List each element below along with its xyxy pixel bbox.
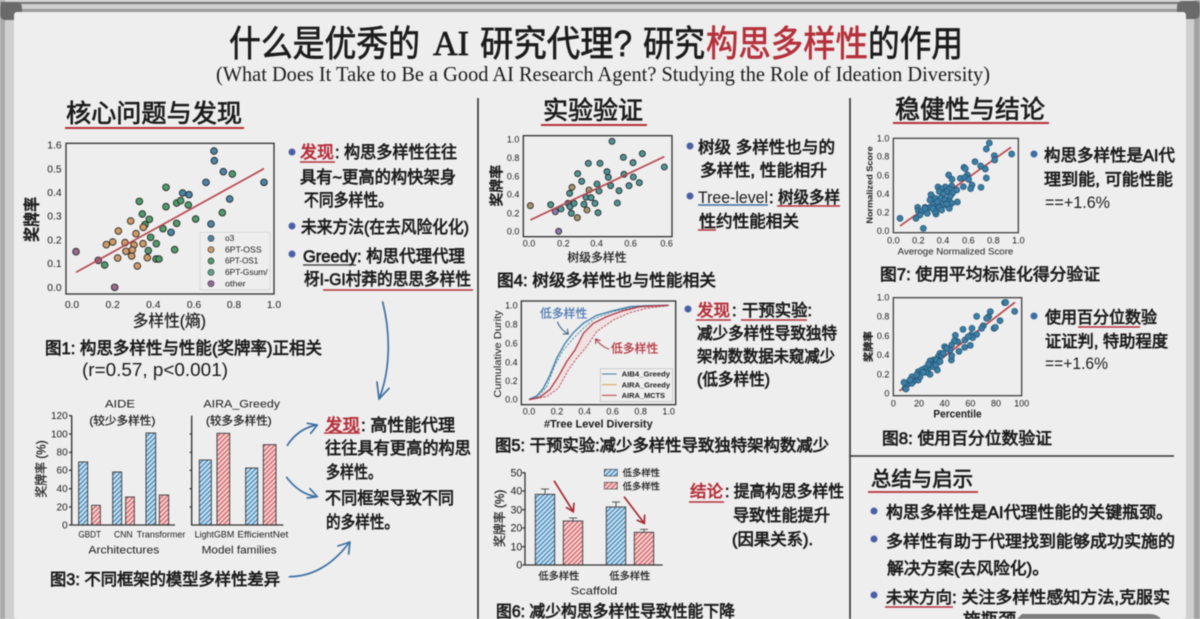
title (229, 23, 963, 64)
chart panel: AIRA_Greedy: (较多多样性) (206, 413, 272, 427)
arrows: figure 3 to findings (287, 423, 350, 577)
text block: figure 8 note: ==+1.6% (1045, 354, 1108, 373)
chart: figure 7 scatter: 0.0 (877, 226, 889, 236)
text block: summary list: 多样性有助于代理找到能够成功实施的 (886, 532, 1175, 551)
chart: figure 5 CDF: 0.6 (606, 406, 619, 416)
chart: figure 8 scatter: Percentile (933, 409, 982, 421)
text block: intervention: 干预实验: (742, 301, 812, 320)
chart panel: AIDE: Architectures (88, 544, 160, 556)
chart: figure 1 scatter: 0.2 (105, 300, 120, 311)
chart: figure 6 bars: 30 (510, 504, 522, 516)
chart panel: AIRA_Greedy: AIRA_Greedy (203, 399, 280, 411)
chart: figure 8 scatter: 20 (914, 398, 924, 408)
chart: figure 6 bars (492, 467, 663, 597)
text block: intervention: 发现 (697, 301, 730, 320)
chart: figure 1 scatter: 6PT-OS1 (225, 256, 259, 266)
text block: findings left: : 构思多样性往往 (335, 143, 457, 162)
chart panel: AIDE: 奖牌率 (%) (33, 440, 48, 498)
chart: figure 8 scatter: 0 (891, 398, 896, 408)
text block: intervention: : (732, 302, 737, 320)
chart: figure 7 scatter (864, 133, 1025, 257)
chart: figure 5 CDF: 1.0 (662, 406, 675, 416)
chart: figure 7 scatter: 0.8 (877, 152, 889, 162)
text block: intervention (684, 301, 837, 389)
column dividers (478, 98, 1174, 619)
chart: figure 6 bars: Scaffold (571, 585, 617, 597)
text block: figure 8 note: 证证判, 特助程度 (1045, 332, 1168, 351)
caption: figure 1: (r=0.57, p<0.001) (82, 359, 228, 380)
caption: figure 5: 图5: 干预实验:减少多样性导致独特架构数减少 (495, 436, 829, 455)
chart: figure 6 bars: 10 (510, 541, 522, 553)
subtitle: (What Does It Take to Be a Good AI Research Agent? Studying the Role of Ideation Diversity) (216, 62, 990, 86)
chart: figure 1 scatter: 6PT-Gsum/ (225, 267, 268, 277)
chart: figure 6 bars: 奖牌率 (%) (492, 490, 507, 547)
chart: figure 7 scatter: 0.2 (877, 208, 889, 218)
arrow: findings down (377, 302, 389, 399)
text block: conclusion (689, 482, 844, 549)
chart: figure 1 scatter (21, 141, 281, 331)
chart: figure 7 scatter: 0.2 (912, 236, 925, 246)
text block: intervention: 架构数数据未窥减少 (697, 347, 835, 366)
chart: figure 7 scatter: 0.4 (877, 189, 889, 199)
chart: figure 6 bars: 低多样性 (609, 569, 650, 582)
chart: figure 8 scatter: 奖牌率 (862, 331, 875, 362)
caption: figure 3: 图3: 不同框架的模型多样性差异 (50, 570, 280, 589)
chart: figure 8 scatter: 0.8 (877, 312, 889, 322)
text block: findings left: 具有~更高的构快架身 (300, 168, 456, 187)
text block: intervention: 减少多样性导致独特 (697, 324, 837, 343)
chart: figure 5 CDF: 0.0 (505, 395, 518, 405)
chart panel: AIDE: Transformer (137, 530, 185, 540)
text block: findings lower: 多样性。 (326, 463, 382, 482)
chart: figure 7 scatter: 1.0 (1012, 236, 1025, 246)
chart: figure 6 bars: 20 (510, 523, 522, 535)
text block: summary list: 未来方向 (886, 588, 952, 607)
chart: figure 5 CDF: 低多样性 (540, 306, 588, 320)
text block: figure 7 note: 理到能, 可能性能 (1044, 170, 1173, 189)
chart panel: AIDE: (较少多样性) (89, 413, 156, 427)
text block: findings left: Greedy: 构思代理代理 (303, 247, 465, 266)
heading: experiments: 实验验证 (543, 97, 643, 125)
text block: summary list: 解决方案(去风险化)。 (887, 559, 1049, 578)
text block: findings lower: 的多样性。 (326, 513, 399, 532)
chart: figure 7 scatter: 0.0 (887, 236, 900, 246)
chart: figure 8 scatter: 1.0 (877, 293, 889, 303)
chart panel: AIDE: 100 (51, 429, 68, 440)
chart: figure 4 scatter: 1.0 (507, 134, 519, 144)
text block: findings left (288, 143, 473, 290)
text block: tree-level: : (769, 189, 774, 207)
text block: figure 7 note: 构思多样性是AI代 (1044, 146, 1175, 165)
chart panel: AIDE (33, 399, 185, 556)
chart: figure 1 scatter: other (225, 278, 246, 288)
chart: figure 1 scatter: 0.1 (47, 259, 62, 270)
chart: figure 1 scatter: 奖牌率 (21, 197, 41, 242)
chart: figure 1 scatter: o3 (225, 233, 235, 243)
chart: figure 7 scatter: 0.4 (937, 236, 949, 246)
chart: figure 5 CDF: 0.4 (505, 357, 518, 367)
chart: figure 4 scatter (488, 134, 673, 265)
chart: figure 3 bars (33, 399, 289, 556)
text block: intervention: (低多样性) (697, 370, 770, 389)
chart: figure 5 CDF: 0.6 (505, 338, 518, 348)
chart: figure 1 scatter: 0.4 (146, 300, 161, 311)
chart: figure 6 bars: 低多样性 (538, 569, 579, 582)
heading: summary: 总结与启示 (871, 468, 973, 491)
chart: figure 5 CDF (493, 300, 676, 431)
chart: figure 5 CDF: 0.2 (505, 376, 518, 386)
chart panel: AIDE: AIDE (105, 399, 135, 411)
chart panel: AIRA_Greedy: LightGBM (195, 530, 234, 540)
chart: figure 5 CDF: 0.0 (523, 406, 535, 416)
chart: figure 7 scatter: 0.6 (877, 170, 889, 180)
chart: figure 1 scatter: 0.6 (187, 300, 201, 311)
chart: figure 5 CDF: 0.8 (634, 406, 647, 416)
chart: figure 8 scatter: 80 (991, 398, 1001, 408)
caption: figure 1: 图1: 构思多样性与性能(奖牌率)正相关 (45, 339, 322, 358)
chart: figure 7 scatter: Normalized Score (864, 146, 874, 224)
chart: figure 8 scatter: 0 (884, 388, 889, 398)
chart panel: AIDE: CNN (114, 530, 133, 540)
chart: figure 1 scatter: 0.2 (47, 235, 62, 246)
caption: figure 7: 图7: 使用平均标准化得分验证 (880, 265, 1100, 284)
chart: figure 5 CDF: 1.0 (505, 300, 518, 310)
chart: figure 7 scatter: Averoge Normalized Score (898, 247, 1013, 257)
chart: figure 5 CDF: AIRA_MCTS (622, 391, 665, 400)
chart: figure 8 scatter: 60 (965, 398, 975, 408)
chart: figure 4 scatter: 0.2 (507, 208, 519, 218)
chart panel: AIDE: 80 (57, 448, 68, 459)
chart panel: AIDE: 20 (57, 502, 68, 513)
chart: figure 6 bars: 50 (510, 467, 522, 479)
chart: figure 5 CDF: #Tree Level Diversity (544, 419, 653, 431)
chart: figure 4 scatter: 0.6 (660, 239, 673, 249)
chart: figure 4 scatter: 0.0 (507, 227, 519, 237)
title: AI (433, 24, 469, 63)
chart: figure 8 scatter: 40 (940, 398, 950, 408)
text block: conclusion: (因果关系). (732, 530, 813, 549)
heading: core questions: 核心问题与发现 (66, 100, 242, 128)
chart: figure 4 scatter: 0.8 (507, 153, 519, 163)
chart: figure 8 scatter: 0.2 (877, 369, 889, 379)
chart: figure 4 scatter: 树级多样性 (567, 251, 627, 265)
chart: figure 4 scatter: 0.4 (507, 190, 519, 200)
caption: figure 8: 图8: 使用百分位数验证 (882, 429, 1052, 448)
chart panel: AIRA_Greedy: EfficientNet (237, 530, 289, 540)
text block: figure 7 note (1030, 146, 1175, 212)
chart panel: AIRA_Greedy: Model families (202, 544, 277, 556)
chart: figure 5 CDF: AIRA_Greedy (622, 380, 671, 389)
chart: figure 1 scatter: 多样性(熵) (133, 312, 206, 331)
text block: findings lower: 发现 (325, 416, 360, 435)
text block: tree-level: Tree-level (698, 188, 768, 207)
title: 研究代理? (480, 23, 632, 64)
text block: tree-level: 性 (699, 212, 716, 231)
text block: findings left: 枒I-GI村莽的思思多样性 (304, 270, 471, 289)
text block: tree-level: 树级 多样性也与的 (698, 138, 835, 157)
title: 什么是优秀的 (229, 23, 420, 64)
text block: figure 8 note: 使用百分位数验 (1045, 308, 1157, 327)
chart: figure 1 scatter: 0.4 (47, 188, 62, 199)
chart panel: AIDE: 60 (57, 466, 68, 477)
text block: summary list: : 关注多样性感知方法,克服实 (952, 588, 1170, 607)
text block: findings lower (324, 416, 471, 532)
chart: figure 8 scatter (862, 293, 1029, 421)
chart panel: AIRA_Greedy (190, 399, 289, 556)
chart: figure 4 scatter: 0.2 (557, 239, 570, 249)
chart: figure 7 scatter: 1.0 (877, 133, 889, 143)
chart: figure 6 bars: 0 (516, 560, 522, 572)
chart: figure 5 CDF: Cumulative Durity (493, 309, 504, 398)
chart: figure 8 scatter: 100 (1014, 398, 1029, 408)
text block: findings left: 不同多样性。 (304, 191, 393, 210)
text block: findings lower: 不同框架导致不同 (325, 489, 454, 508)
text block: figure 8 note (1030, 308, 1168, 373)
chart: figure 1 scatter: 0.0 (65, 300, 79, 311)
chart: figure 5 CDF: 0.8 (505, 319, 518, 329)
title: 研究 (643, 23, 705, 64)
chart: figure 5 CDF: 0.2 (551, 406, 563, 416)
title: 构思多样性 (706, 23, 868, 64)
heading: robustness: 稳健性与结论 (895, 96, 1045, 124)
text block: conclusion: : 提高构思多样性 (725, 482, 844, 501)
text block: tree-level: 树级多样 (778, 188, 840, 207)
text block: tree-level: 约性能相关 (716, 212, 799, 231)
chart: figure 1 scatter: 0.5 (47, 164, 62, 175)
text block: conclusion: 结论 (690, 482, 724, 501)
chart: figure 1 scatter: 6PT-OSS (225, 244, 262, 254)
chart: figure 4 scatter: 0.6 (624, 239, 637, 249)
watermark tab at bottom edge (1017, 614, 1161, 619)
chart: figure 1 scatter: 0.8 (227, 300, 241, 311)
chart: figure 7 scatter: 0.6 (962, 236, 975, 246)
chart: figure 5 CDF: 0.4 (578, 406, 591, 416)
text block: findings lower: 往往具有更高的构思 (325, 439, 471, 458)
text block: conclusion: 导致性能提升 (733, 506, 830, 525)
chart: figure 1 scatter: 1.6 (47, 141, 62, 152)
text block: figure 7 note: ==+1.6% (1045, 193, 1110, 212)
text block: summary list: 构思多样性是AI代理性能的关键瓶颈。 (886, 503, 1173, 522)
chart: figure 8 scatter: 0.4 (877, 350, 889, 360)
chart: figure 5 CDF: 低多样性 (611, 341, 659, 355)
chart: figure 1 scatter: 0.3 (47, 212, 62, 223)
chart: figure 6 bars: 40 (510, 486, 522, 498)
caption: figure 4: 图4: 树级多样性也与性能相关 (497, 271, 716, 290)
chart panel: AIDE: GBDT (78, 530, 101, 540)
chart: figure 8 scatter: 0.6 (877, 331, 889, 341)
chart: figure 4 scatter: 0.0 (523, 239, 535, 249)
text block: tree-level: 多样性, 性能相升 (700, 161, 827, 180)
chart: figure 4 scatter: 0.4 (590, 239, 603, 249)
chart: figure 1 scatter: 0.0 (47, 283, 62, 294)
chart: figure 6 bars: 低多样性 (623, 480, 660, 491)
chart: figure 5 CDF: AIB4_Greedy (622, 370, 671, 379)
chart: figure 6 bars: 低多样性 (623, 467, 660, 478)
chart: figure 1 scatter: 1.0 (267, 300, 281, 311)
title: 的作用 (868, 23, 963, 64)
chart panel: AIDE: 0 (62, 520, 68, 531)
chart panel: AIDE: 120 (51, 411, 68, 422)
text block: summary list (870, 503, 1175, 619)
text block: findings left: 未来方法(在去风险化化) (301, 218, 469, 237)
chart: figure 4 scatter: 奖牌率 (488, 165, 504, 206)
text block: tree-level (686, 138, 840, 231)
text block: findings left: 发现 (300, 143, 334, 162)
text block: findings lower: : 高性能代理 (361, 416, 455, 435)
chart panel: AIDE: 40 (57, 484, 68, 495)
chart: figure 7 scatter: 0.8 (987, 236, 1000, 246)
chart: figure 4 scatter: 0.6 (507, 171, 519, 181)
caption: figure 1 (45, 339, 322, 380)
